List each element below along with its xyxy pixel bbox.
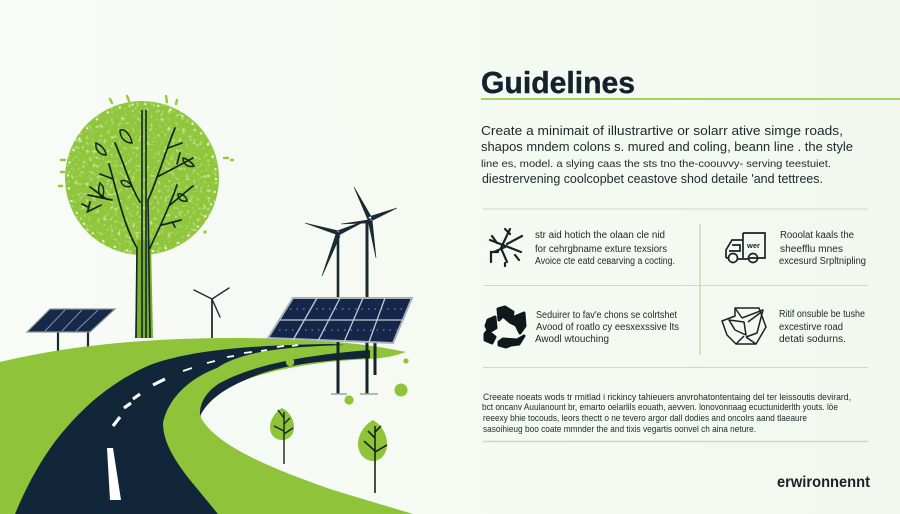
cell text: detati sodurns.	[779, 334, 846, 345]
icon: recycling leaf	[722, 308, 766, 344]
cell text: Avoice cte eatd cевarving a cocting.	[535, 256, 675, 267]
large solar panel	[268, 298, 412, 343]
small solar panel on hill	[27, 309, 115, 353]
icon: truck	[726, 233, 765, 262]
panel: landscape illustration	[0, 96, 413, 514]
cell text: sheefflu mnes	[780, 244, 843, 255]
green dots	[344, 358, 409, 405]
tree canopy	[59, 96, 233, 255]
footer text block: reeexy bhie tocouds, leors thectt o ne tevero argor dall dodies and oncolrs aand tlaeaure	[483, 413, 807, 424]
footer text block: bct oncanv Auulanount br, emarto oelarlils eouath, aevven. lonovonnaag ecuctuniderlth youts. löe	[482, 402, 838, 413]
small wind turbine	[194, 288, 229, 338]
tree trunk	[135, 110, 153, 338]
intro text block	[481, 123, 853, 186]
solar panel stand	[331, 342, 378, 394]
cell text: excestirve road	[779, 322, 843, 333]
wind turbine right	[341, 187, 397, 300]
cell text: for cehrgbname exture texsiors	[535, 244, 667, 255]
cell text: Avood of roatlo cy eesxexssive lts	[536, 322, 679, 333]
road	[15, 344, 345, 514]
footer divider	[483, 440, 868, 442]
intro text block: diestrervening coolcopbet ceastove shod detaile 'and tettrees.	[482, 172, 823, 186]
heading rule	[481, 98, 900, 100]
icon: branches	[490, 229, 522, 266]
heading: Guidelines	[481, 65, 635, 100]
green hill	[0, 338, 413, 514]
cell text	[535, 230, 675, 267]
cell text: Ritif onsuble be tushe	[779, 309, 865, 320]
cell text	[535, 310, 679, 345]
footer text block: sasoihieug boo coate mmnder the and tixis vegartis oonvel ch aina neture.	[483, 424, 756, 435]
cell text	[779, 309, 865, 345]
footer text block: Creeate noeats wods tr rmitlad i rickincy tahieuers anvrohatontentaing del ter leissoutis devirard,	[483, 392, 851, 403]
brand wordmark: erwironnennt	[777, 474, 870, 491]
icon label: wer	[746, 241, 760, 250]
intro text block: Create a minimait of illustrartive or solarr ative simge roads,	[481, 123, 843, 138]
grid dividers	[483, 209, 868, 368]
intro text block: shapos mndem colons s. mured and coling, beann line . the style	[481, 139, 853, 154]
cell: bottom right	[722, 308, 865, 345]
road centre dashes	[107, 345, 298, 500]
small tree right	[358, 420, 387, 493]
large tree	[59, 96, 233, 338]
inner dark arc	[200, 350, 370, 416]
cell text: str aid hotich the olaan cle nid	[535, 230, 665, 241]
cell text: Rooolat kaals the	[780, 230, 854, 241]
tree leaves	[96, 130, 194, 201]
cell text: excesurd Srpltnipling	[779, 256, 866, 267]
cell text	[779, 230, 866, 267]
icon: recycle	[485, 307, 525, 347]
vertical grid divider	[699, 224, 701, 355]
cell: top left	[490, 229, 675, 267]
small tree left	[270, 408, 294, 464]
cell text: Seduirer to fav'e chons se colrtshet	[536, 310, 677, 321]
tree branches	[82, 128, 193, 248]
footer text block	[482, 392, 851, 435]
intro text block: line es, model. a slying caas the sts tno the-cоouvvy- serving teestuiet.	[481, 158, 831, 170]
cell: bottom left	[485, 307, 679, 347]
wind turbine left	[305, 220, 367, 300]
cell: top right	[726, 230, 866, 267]
small green bump on arc	[286, 358, 294, 366]
cell text: Awodl wtouching	[535, 334, 609, 345]
